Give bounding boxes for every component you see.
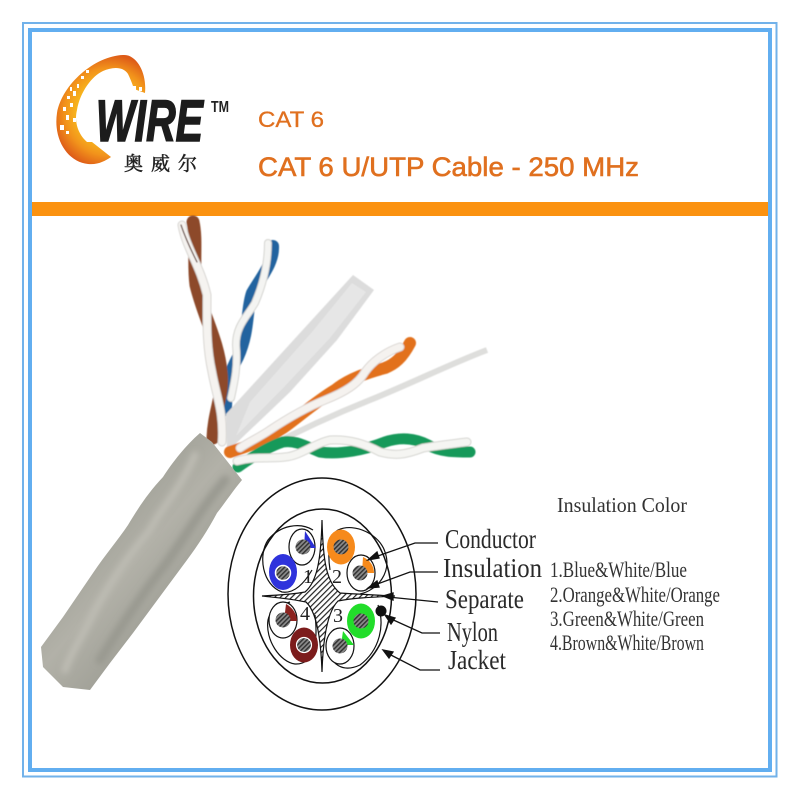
part labels: Insulation [443, 553, 542, 583]
pair numbers [300, 566, 343, 627]
insulation color heading: Insulation Color [557, 493, 687, 517]
cable jacket [41, 433, 242, 690]
logo [56, 55, 229, 175]
tape highlight [236, 283, 366, 436]
nylon filler [376, 606, 386, 616]
brown twisted pair [181, 222, 222, 442]
pair 2 orange [327, 530, 375, 591]
logo wordmark: WIRE [96, 89, 205, 154]
subtitle: CAT 6 [258, 107, 324, 132]
insulation color list: 2.Orange&White/Orange [550, 582, 720, 607]
part labels: Conductor [445, 524, 536, 554]
trademark: TM [211, 99, 229, 116]
logo swoosh ring [56, 55, 145, 164]
part labels: Separate [445, 584, 524, 614]
orange twisted pair [230, 343, 410, 452]
insulation color list: 1.Blue&White/Blue [550, 557, 687, 582]
orange header bar [32, 202, 768, 216]
pair numbers: 2 [332, 566, 342, 588]
green twisted pair [237, 439, 470, 467]
inner sheath outline [254, 509, 392, 683]
pair 3 green [326, 604, 375, 664]
foil separator tape [226, 275, 374, 452]
insulation color list: 4.Brown&White/Brown [550, 630, 704, 655]
logo digital dots [60, 70, 142, 134]
pair numbers: 1 [303, 566, 313, 588]
jacket outline [228, 478, 416, 710]
part labels [443, 524, 542, 675]
logo chinese name: 奥威尔 [124, 153, 197, 175]
insulation color list [550, 557, 720, 655]
pair numbers: 3 [333, 605, 343, 627]
cable photo [181, 222, 487, 467]
pair enclosures [263, 526, 387, 668]
main title: CAT 6 U/UTP Cable - 250 MHz [258, 152, 639, 182]
part labels: Jacket [448, 645, 506, 675]
insulation color list: 3.Green&White/Green [550, 606, 704, 631]
blue twisted pair [226, 243, 273, 410]
pair numbers: 4 [300, 603, 310, 625]
cross separator [262, 520, 395, 672]
pair 1 blue [269, 529, 316, 590]
pair 4 brown [269, 602, 318, 662]
jacket shading [65, 455, 225, 670]
leader lines and arrows [368, 543, 440, 670]
cross-section diagram [228, 478, 440, 710]
white nylon string [262, 350, 487, 450]
part labels: Nylon [447, 617, 498, 647]
